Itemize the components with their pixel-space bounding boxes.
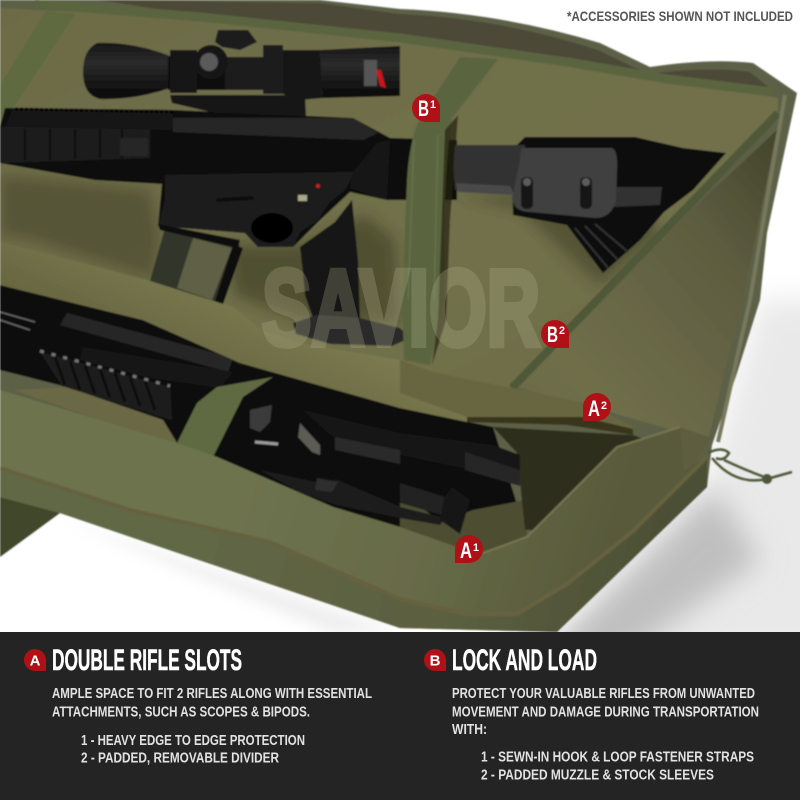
list: features bbox=[481, 750, 754, 783]
upper receiver detail bbox=[242, 147, 268, 172]
scope bbox=[83, 30, 400, 116]
interior back wall bbox=[0, 8, 778, 410]
list: features: 2 - PADDED, REMOVABLE DIVIDER bbox=[81, 751, 279, 767]
callout: B1: B bbox=[418, 96, 429, 121]
vertical strap bbox=[402, 57, 498, 365]
icon: A badge: A bbox=[30, 652, 41, 670]
callout: B1: 1 bbox=[430, 99, 436, 111]
callout: A1: A bbox=[460, 538, 472, 563]
lower rifle bbox=[0, 312, 520, 534]
right zipper bbox=[718, 95, 785, 442]
bipod bbox=[250, 405, 272, 432]
callout: A2 bbox=[583, 393, 611, 421]
callout: B2: 2 bbox=[559, 325, 565, 337]
callout: B2: B bbox=[547, 322, 558, 347]
heading: lock and load: LOCK AND LOAD bbox=[452, 644, 597, 677]
wall shadows bbox=[0, 175, 160, 280]
list: features: 1 - HEAVY EDGE TO EDGE PROTECTION bbox=[81, 733, 305, 749]
heading: double rifle slots: DOUBLE RIFLE SLOTS bbox=[52, 644, 242, 677]
zipper bbox=[0, 457, 707, 614]
icon: A badge bbox=[24, 649, 46, 671]
lower compartment dark interior bbox=[0, 285, 525, 548]
text: description: WITH: bbox=[452, 722, 487, 738]
text: description bbox=[452, 686, 759, 738]
top left strap bbox=[0, 11, 75, 128]
callout: A1 bbox=[455, 535, 483, 563]
list: features bbox=[81, 733, 305, 767]
corner floor bbox=[650, 427, 712, 478]
rifle stock bbox=[454, 137, 726, 273]
photo: open rifle case bbox=[0, 0, 797, 632]
top rail bbox=[5, 108, 173, 130]
top rim bbox=[100, 0, 772, 90]
handguard bbox=[0, 127, 150, 163]
upper rifle bbox=[0, 108, 457, 346]
text: description bbox=[52, 686, 372, 720]
front pad bbox=[0, 390, 707, 614]
panel: features bbox=[0, 632, 800, 800]
callout: A1: 1 bbox=[473, 542, 479, 554]
list: features: 2 - PADDED MUZZLE & STOCK SLEEVES bbox=[481, 767, 714, 783]
icon: B badge: B bbox=[430, 652, 441, 670]
lower strap bbox=[177, 377, 273, 457]
callout: A2: A bbox=[588, 396, 600, 421]
upper divider pad bbox=[0, 242, 633, 435]
text: description: AMPLE SPACE TO FIT 2 RIFLES ALONG WITH ESSENTIAL bbox=[52, 686, 372, 702]
column: double rifle slots bbox=[24, 644, 372, 767]
flap with binding bbox=[510, 113, 778, 440]
magazine bbox=[150, 228, 240, 305]
muzzle sleeve bbox=[493, 427, 647, 530]
text: description: ATTACHMENTS, SUCH AS SCOPES & BIPODS. bbox=[52, 704, 310, 720]
callout: B1 bbox=[412, 94, 440, 122]
compartment floor bbox=[13, 387, 177, 443]
rifle silhouette bbox=[0, 108, 457, 247]
lower receiver bbox=[158, 172, 355, 247]
stock silhouette bbox=[512, 137, 726, 273]
callout: B2 bbox=[541, 320, 569, 348]
callout: A2: 2 bbox=[601, 400, 607, 412]
icon: B badge bbox=[424, 649, 446, 671]
top binding bbox=[35, 4, 772, 92]
pistol grip bbox=[300, 200, 360, 320]
upper receiver top bbox=[173, 118, 378, 140]
carry strap bbox=[0, 497, 60, 557]
drawcord bbox=[708, 450, 792, 480]
watermark: SAVIOR bbox=[262, 247, 540, 368]
case outer shell bbox=[0, 0, 797, 632]
column: lock and load bbox=[424, 644, 759, 783]
lower binding bbox=[0, 457, 707, 632]
